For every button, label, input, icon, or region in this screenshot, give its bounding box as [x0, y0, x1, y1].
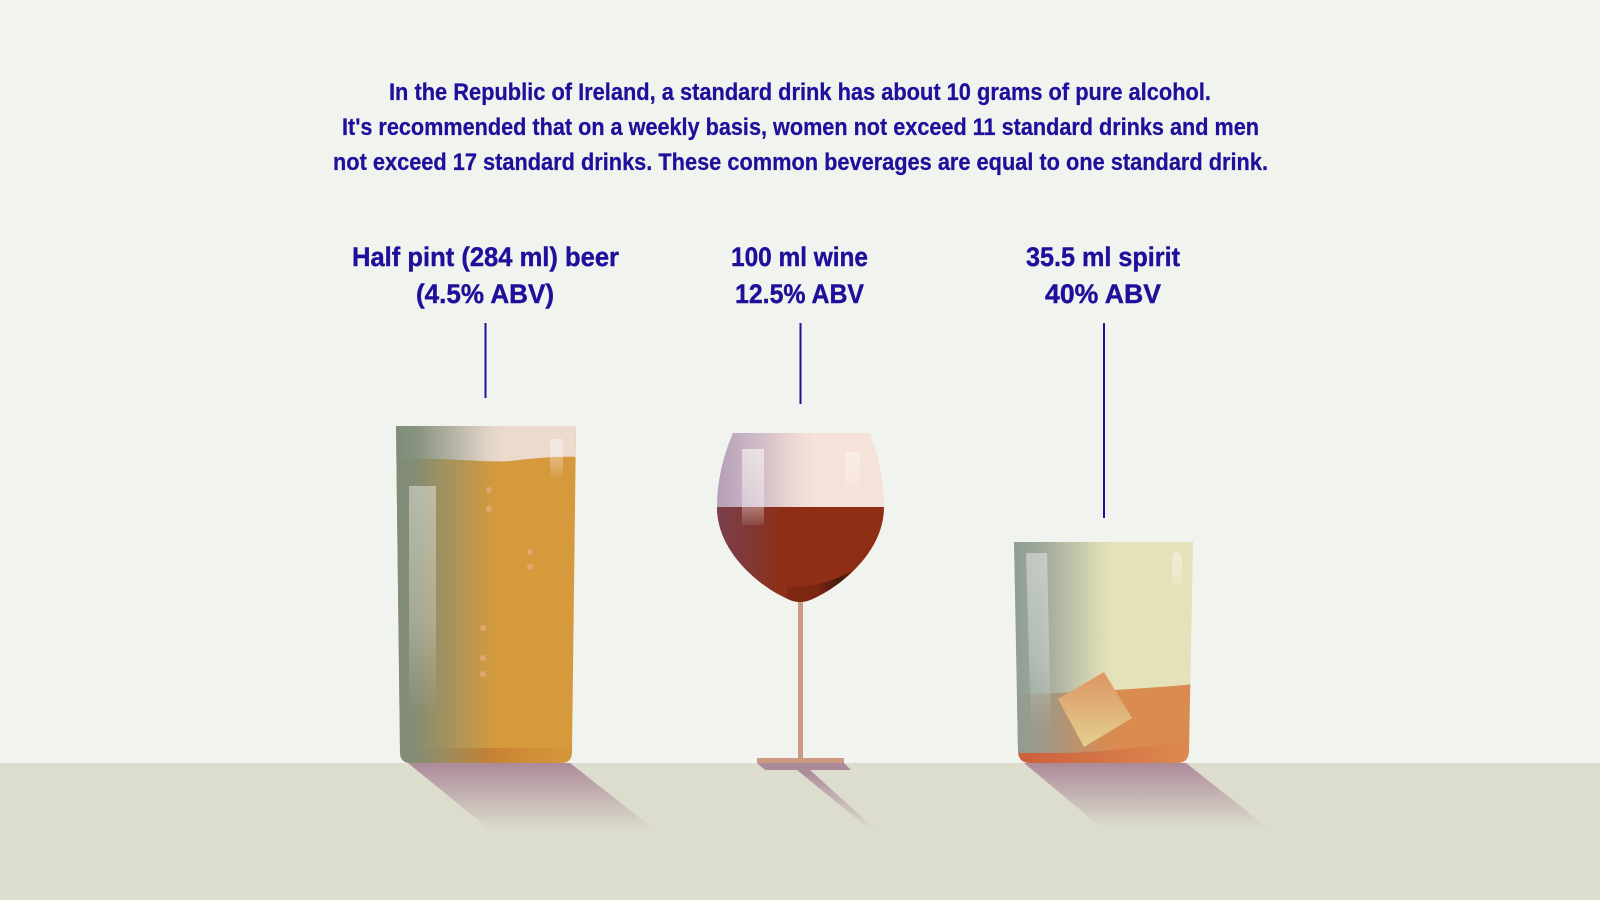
label: spirit: 40% ABV [1045, 279, 1161, 309]
intro text: not exceed 17 standard drinks. These common beverages are equal to one standard drink. [333, 149, 1268, 176]
intro text: In the Republic of Ireland, a standard drink has about 10 grams of pure alcohol. [389, 79, 1211, 106]
label: wine [731, 242, 868, 309]
label: wine: 100 ml wine [731, 242, 868, 272]
label: beer: (4.5% ABV) [416, 279, 554, 309]
label: spirit [1026, 242, 1180, 309]
intro text: It's recommended that on a weekly basis, women not exceed 11 standard drinks and men [342, 114, 1259, 141]
intro text [333, 79, 1268, 176]
icon: spirit tumbler [1010, 538, 1200, 768]
label: spirit: 35.5 ml spirit [1026, 242, 1180, 272]
label: beer [352, 242, 619, 309]
icon: wine glass [710, 430, 890, 763]
label: wine: 12.5% ABV [735, 279, 864, 309]
icon: ice cube [1058, 672, 1132, 747]
connector: spirit [1103, 323, 1105, 518]
icon: beer glass [390, 420, 580, 770]
connector: beer [484, 323, 486, 398]
shadow: beer [408, 763, 655, 830]
shadow: wine foot and stem [757, 763, 874, 828]
shadow: spirit [1024, 763, 1268, 828]
table surface [0, 763, 1600, 900]
connector: wine [800, 323, 802, 404]
label: beer: Half pint (284 ml) beer [352, 242, 619, 272]
